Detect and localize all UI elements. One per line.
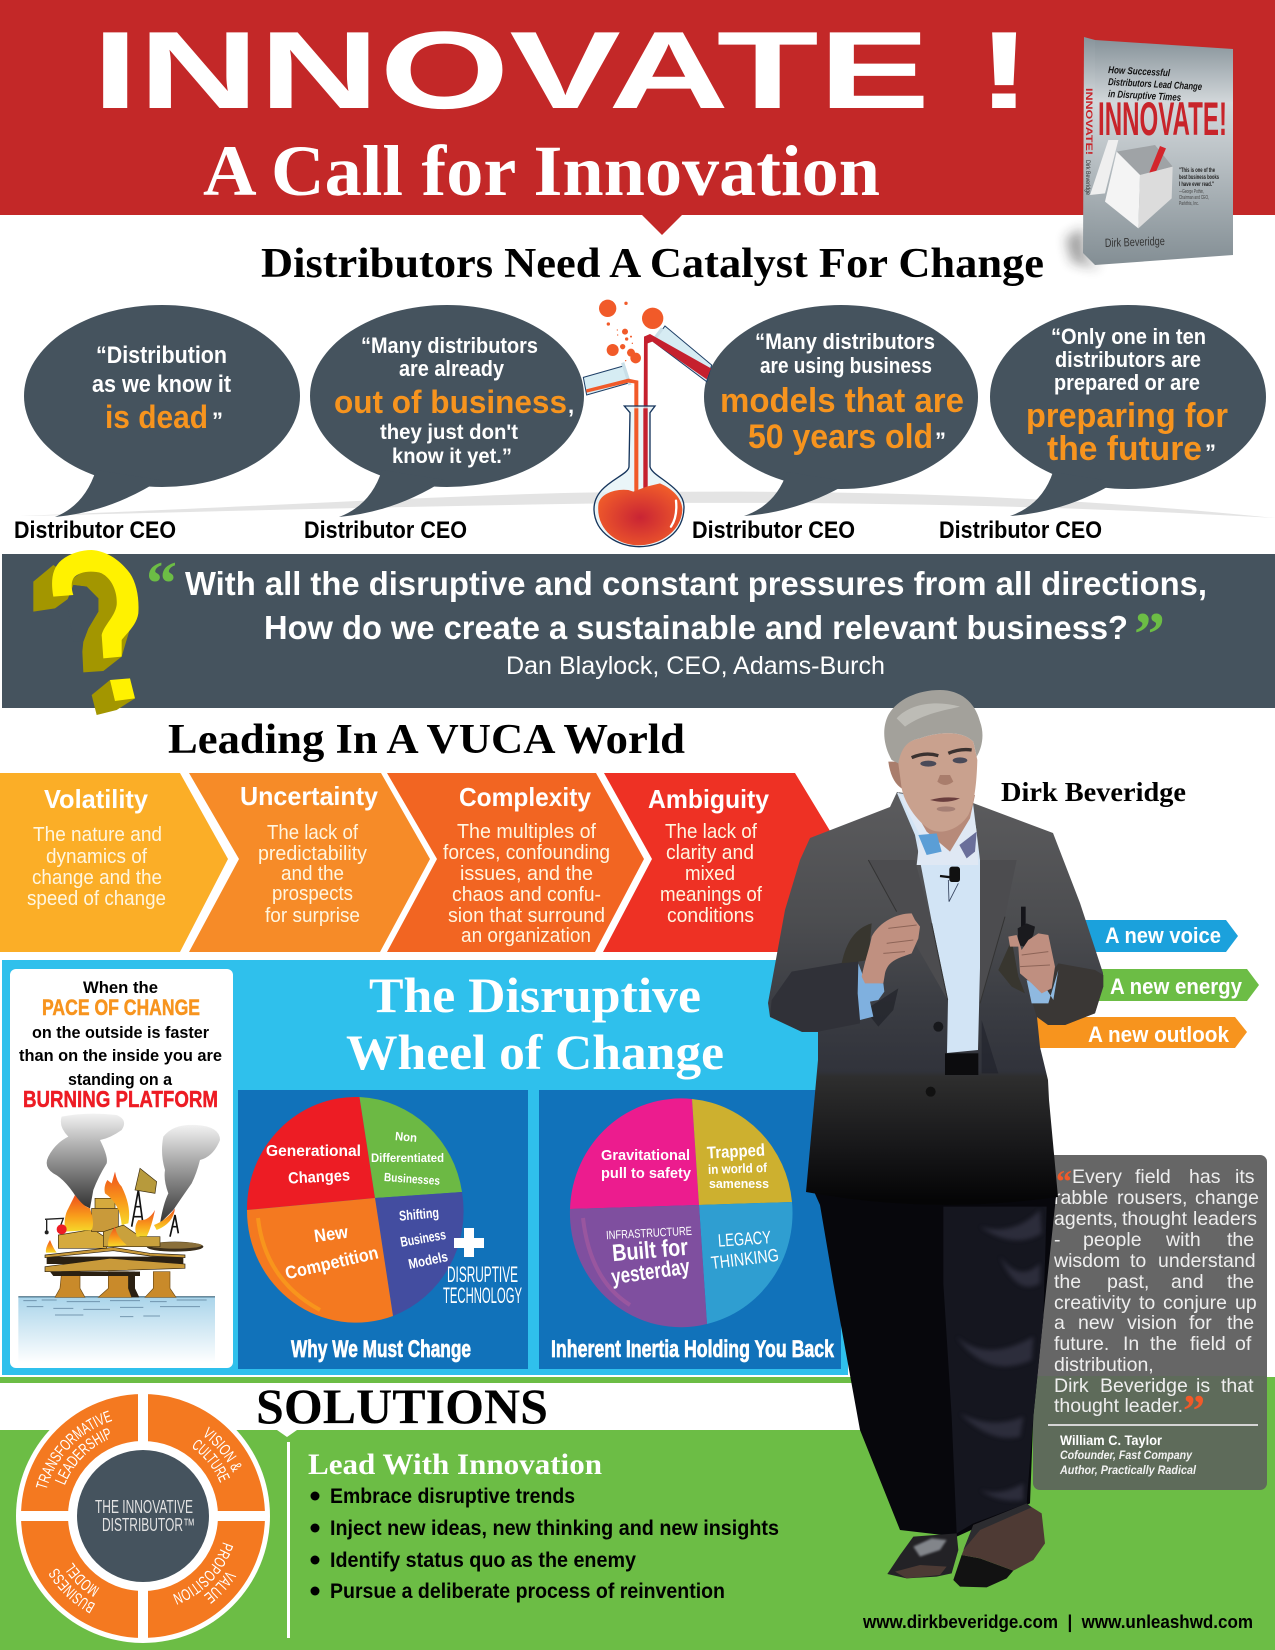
speech bubble 1: “Distribution — [96, 342, 227, 369]
speech bubble 2: they just don't — [380, 421, 518, 444]
testimonial text: people — [1083, 1229, 1142, 1251]
diagram: innovative distributor wheel: MODEL — [66, 1562, 100, 1597]
testimonial text: understand — [1158, 1250, 1256, 1272]
text block: lead with innovation: Embrace disruptive trends — [330, 1485, 575, 1508]
testimonial text: future. — [1054, 1333, 1109, 1355]
testimonial text: thought — [1122, 1208, 1188, 1230]
speech bubble 4: “Only one in ten — [1051, 324, 1206, 349]
testimonial text: past, — [1107, 1271, 1149, 1293]
header banner — [0, 0, 1275, 235]
testimonial text: rabble — [1054, 1187, 1108, 1209]
testimonial text: is — [1196, 1375, 1210, 1397]
pie chart: why we must change: Shifting — [398, 1204, 440, 1224]
shirt — [897, 793, 981, 1053]
figure: Dirk Beveridge photo — [768, 690, 1103, 1587]
chevron: volatility: Volatility — [44, 784, 149, 814]
diagram: innovative distributor wheel: THE INNOVATIVE — [95, 1497, 193, 1517]
quotation text: How do we create a sustainable and relevant business? — [264, 609, 1128, 646]
diagram: innovative distributor wheel: TRANSFORMATIVE — [36, 1410, 112, 1488]
chevron: ambiguity: Ambiguity — [648, 784, 770, 814]
speech bubble 3: “Many distributors — [755, 329, 935, 354]
book cover: I have ever read." — [1179, 182, 1214, 188]
green stripe and solutions band — [0, 1377, 1275, 1650]
book cover: in Disruptive Times — [1108, 89, 1182, 104]
testimonial text: vision — [1127, 1312, 1177, 1334]
chevron: ambiguity — [603, 773, 847, 952]
pie chart: inherent inertia: Gravitational — [601, 1147, 690, 1164]
testimonial text: leaders — [1193, 1208, 1257, 1230]
chevron: ambiguity: The lack of — [665, 821, 757, 843]
quotation text: Dan Blaylock, CEO, Adams-Burch — [506, 652, 885, 680]
card: burning platform: on the outside is faster — [32, 1023, 209, 1042]
footer links: www.dirkbeveridge.com | www.unleashwd.com — [862, 1612, 1253, 1632]
diagram: innovative distributor wheel: VISION & — [204, 1426, 242, 1472]
testimonial box: ” — [1183, 1386, 1205, 1435]
pie chart: why we must change: Changes — [288, 1167, 351, 1188]
testimonial text: - — [1054, 1229, 1060, 1251]
chevron: uncertainty — [189, 773, 430, 952]
trousers and shoes — [813, 1190, 1057, 1587]
pie chart: inherent inertia: INFRASTRUCTURE — [606, 1224, 692, 1242]
testimonial text: rousers, — [1117, 1187, 1187, 1209]
speech bubble 4 — [990, 305, 1266, 516]
icon: question mark — [33, 550, 139, 715]
speech bubble 4: the future — [1047, 430, 1202, 468]
pie chart: inherent inertia: yesterday — [610, 1253, 692, 1289]
chevron: uncertainty: predictability — [258, 843, 367, 865]
testimonial text: the — [1054, 1271, 1081, 1293]
quotation text — [146, 550, 1207, 680]
book cover: Parkthis, Inc. — [1179, 201, 1199, 207]
pie chart: why we must change: Non — [394, 1129, 418, 1145]
speech bubble 1 — [24, 305, 300, 517]
quotation text: With all the disruptive and constant pressures from all directions, — [185, 565, 1207, 602]
subtitle: A Call for Innovation — [203, 131, 880, 211]
chevron: complexity: Complexity — [459, 782, 591, 812]
pie chart: inherent inertia — [570, 1098, 793, 1327]
testimonial text — [1053, 1166, 1259, 1417]
tag: a new outlook: A new outlook — [1088, 1022, 1230, 1047]
chevron: uncertainty: for surprise — [265, 905, 360, 927]
heading: wheel of change: Wheel of Change — [346, 1024, 724, 1080]
chevron: ambiguity: mixed — [685, 863, 735, 885]
testimonial text: Beveridge — [1100, 1375, 1188, 1397]
icon: plus sign — [454, 1228, 484, 1257]
quote band — [2, 550, 1275, 708]
label: disruptive technology: TECHNOLOGY — [443, 1283, 522, 1308]
testimonial text: Every — [1072, 1166, 1122, 1188]
testimonial text: its — [1235, 1166, 1255, 1188]
chevron: uncertainty: Uncertainty — [240, 781, 379, 811]
diagram: innovative distributor wheel: VALUE — [204, 1572, 236, 1604]
speech bubble 2: are already — [399, 356, 505, 381]
speech bubble 4: ” — [1205, 440, 1216, 465]
testimonial text: change — [1195, 1187, 1259, 1209]
text block: lead with innovation: Identify status quo as the enemy — [330, 1549, 636, 1572]
speech bubble 3: ” — [935, 428, 946, 453]
panel: inherent inertia — [539, 1090, 841, 1369]
head — [884, 690, 982, 865]
chevron: complexity: The multiples of — [457, 821, 596, 843]
tag: a new energy: A new energy — [1110, 974, 1243, 999]
diagram: innovative distributor wheel: DISTRIBUTOR™ — [102, 1515, 195, 1535]
pie chart: why we must change: Differentiated — [371, 1151, 444, 1165]
testimonial text: for — [1189, 1312, 1212, 1334]
testimonial text: has — [1189, 1166, 1221, 1188]
tag: a new voice — [1080, 920, 1238, 952]
book cover: —George Pothin, — [1179, 189, 1204, 195]
label: disruptive technology — [443, 1262, 522, 1308]
torso details — [770, 860, 1103, 1097]
caption: Why We Must Change — [291, 1336, 471, 1363]
chevron: complexity — [387, 773, 644, 952]
chevron: complexity: an organization — [461, 925, 591, 947]
chevron: uncertainty: The lack of — [267, 822, 358, 844]
pie chart: why we must change — [247, 1097, 464, 1323]
title: INNOVATE ! — [92, 9, 1032, 132]
speech bubble 3: 50 years old — [748, 418, 933, 456]
quote attributions: Distributor CEO — [692, 517, 855, 544]
book cover: best business books — [1179, 175, 1219, 181]
book cover: INNOVATE! — [1084, 88, 1094, 155]
chevron: volatility: The nature and — [33, 824, 162, 846]
testimonial text: field — [1135, 1166, 1171, 1188]
panel: why we must change — [238, 1090, 528, 1369]
speech bubble 3: models that are — [720, 382, 964, 420]
speech bubble 3 — [704, 305, 978, 516]
chevron: ambiguity: conditions — [667, 905, 754, 927]
heading: solutions — [256, 1378, 548, 1638]
book cover: Distributors Lead Change — [1108, 77, 1203, 93]
pie chart: why we must change: New — [313, 1222, 350, 1246]
testimonial text: up — [1235, 1292, 1257, 1314]
testimonial box: “ — [1056, 1163, 1072, 1199]
speech bubble 2: , — [568, 393, 574, 418]
book cover: "This is one of the — [1179, 168, 1215, 174]
speech bubble 2: “Many distributors — [361, 333, 538, 358]
speech bubble 2: out of business — [334, 384, 567, 420]
pie chart: why we must change: Competition — [283, 1242, 380, 1283]
testimonial text: field — [1190, 1333, 1226, 1355]
testimonial text: the — [1150, 1333, 1177, 1355]
heading: solutions: SOLUTIONS — [256, 1378, 548, 1434]
chevron: volatility: speed of change — [27, 888, 166, 910]
chevron: uncertainty: and the — [281, 863, 344, 885]
speech bubble 1: ” — [212, 408, 223, 433]
quote attributions: Distributor CEO — [304, 517, 467, 544]
testimonial text: of — [1235, 1333, 1252, 1355]
icon: chemistry flask — [583, 300, 712, 547]
pie chart: why we must change: Business — [399, 1226, 447, 1250]
quote attributions: Distributor CEO — [14, 517, 176, 544]
name label: Dirk Beveridge — [1001, 777, 1186, 807]
quote attributions: Distributor CEO — [939, 517, 1102, 544]
chevron: volatility: dynamics of — [46, 846, 147, 868]
card: burning platform: than on the inside you are — [19, 1046, 222, 1065]
tag: a new voice: A new voice — [1105, 923, 1221, 948]
chevron: complexity: sion that surround — [448, 905, 605, 927]
text block: lead with innovation: Inject new ideas, new thinking and new insights — [330, 1517, 779, 1540]
caption: Inherent Inertia Holding You Back — [551, 1336, 834, 1363]
testimonial text: agents, — [1054, 1208, 1118, 1230]
diagram: innovative distributor wheel: CULTURE — [192, 1440, 230, 1483]
testimonial text: that — [1221, 1375, 1254, 1397]
book cover: Dirk Beveridge — [1084, 160, 1090, 196]
panel: disruptive wheel background — [2, 960, 848, 1375]
pie chart: inherent inertia: pull to safety — [601, 1165, 692, 1182]
card: burning platform — [10, 969, 233, 1368]
pie chart: inherent inertia: Built for — [611, 1234, 689, 1267]
testimonial text: creativity — [1054, 1292, 1131, 1314]
testimonial box — [1033, 1155, 1267, 1490]
quotation text: “ — [146, 550, 177, 618]
quote attributions — [14, 517, 1102, 544]
label: disruptive technology: DISRUPTIVE — [447, 1262, 518, 1287]
testimonial text: distribution, — [1054, 1354, 1154, 1376]
chevron: uncertainty: prospects — [272, 883, 353, 905]
book cover — [1066, 37, 1233, 268]
speech bubble 4: preparing for — [1026, 397, 1228, 435]
testimonial text: to — [1130, 1250, 1146, 1272]
speech bubble 1: as we know it — [92, 371, 231, 398]
chevron: volatility — [0, 773, 228, 952]
diagram: innovative distributor wheel: LEADERSHIP — [54, 1428, 110, 1485]
chevron: complexity: issues, and the — [460, 863, 593, 885]
heading: wheel of change — [346, 967, 724, 1080]
testimonial text: the — [1227, 1312, 1254, 1334]
testimonial text: conjure — [1163, 1292, 1227, 1314]
pie chart: why we must change: Models — [407, 1248, 449, 1272]
diagram: innovative distributor wheel: BUSINESS — [49, 1568, 96, 1614]
chevron: volatility: change and the — [32, 867, 162, 889]
section heading: catalyst: Distributors Need A Catalyst For Change — [261, 241, 1044, 287]
testimonial text: a — [1054, 1312, 1065, 1334]
testimonial box: Author, Practically Radical — [1059, 1463, 1197, 1477]
speech bubble 4: distributors are — [1055, 347, 1201, 372]
speech bubble 1: is dead — [105, 399, 208, 435]
chevron: complexity: forces, confounding — [443, 842, 610, 864]
pie chart: inherent inertia: THINKING — [710, 1245, 780, 1273]
testimonial box: Cofounder, Fast Company — [1060, 1448, 1193, 1462]
section heading: VUCA: Leading In A VUCA World — [168, 717, 685, 763]
card: burning platform: BURNING PLATFORM — [23, 1086, 218, 1112]
text block: lead with innovation — [308, 1448, 779, 1603]
pie chart: inherent inertia: Trapped — [707, 1140, 765, 1163]
speech bubble 3: are using business — [760, 353, 932, 378]
chevron: ambiguity: clarity and — [666, 842, 754, 864]
speech bubble 2 — [310, 305, 584, 517]
card: burning platform: PACE OF CHANGE — [42, 995, 200, 1020]
chevron: complexity: chaos and confu- — [452, 884, 601, 906]
pie chart: why we must change: Generational — [266, 1143, 361, 1160]
testimonial text: In — [1123, 1333, 1139, 1355]
text block: lead with innovation: Pursue a deliberate process of reinvention — [330, 1580, 725, 1603]
jacket — [768, 792, 1103, 1205]
pie chart: why we must change: Businesses — [384, 1170, 441, 1188]
heading: wheel of change: The Disruptive — [369, 967, 701, 1023]
pie chart: inherent inertia: LEGACY — [717, 1227, 772, 1251]
testimonial text: the — [1227, 1229, 1254, 1251]
ground swoosh — [20, 492, 1275, 518]
card: burning platform: standing on a — [68, 1070, 173, 1089]
card: burning platform: When the — [83, 978, 158, 997]
testimonial text: to — [1139, 1292, 1155, 1314]
diagram: innovative distributor wheel: PROPOSITION — [173, 1542, 234, 1605]
pie chart: inherent inertia: in world of — [708, 1160, 768, 1177]
testimonial text: wisdom — [1053, 1250, 1120, 1272]
testimonial text: thought leader. — [1054, 1395, 1183, 1417]
testimonial text: and — [1171, 1271, 1204, 1293]
testimonial text: Dirk — [1054, 1375, 1089, 1397]
pie chart: inherent inertia: sameness — [709, 1176, 769, 1191]
tag: a new outlook — [1037, 1017, 1247, 1048]
tag: a new energy — [1090, 969, 1259, 1001]
speech bubble 2: know it yet.” — [392, 445, 512, 468]
quotation text: ” — [1134, 601, 1165, 669]
testimonial text: with — [1165, 1229, 1201, 1251]
testimonial text: new — [1078, 1312, 1115, 1334]
chevron: ambiguity: meanings of — [660, 884, 762, 906]
illustration: burning oil rig — [18, 1114, 220, 1363]
speech bubble 4: prepared or are — [1054, 370, 1200, 395]
book cover: How Successful — [1108, 65, 1171, 79]
book cover: Chairman and CEO, — [1179, 195, 1209, 201]
testimonial box: William C. Taylor — [1060, 1432, 1163, 1448]
text block: lead with innovation: Lead With Innovation — [308, 1448, 602, 1481]
diagram: innovative distributor wheel — [16, 1394, 270, 1643]
testimonial text: the — [1227, 1271, 1254, 1293]
book cover: Dirk Beveridge — [1105, 234, 1165, 250]
